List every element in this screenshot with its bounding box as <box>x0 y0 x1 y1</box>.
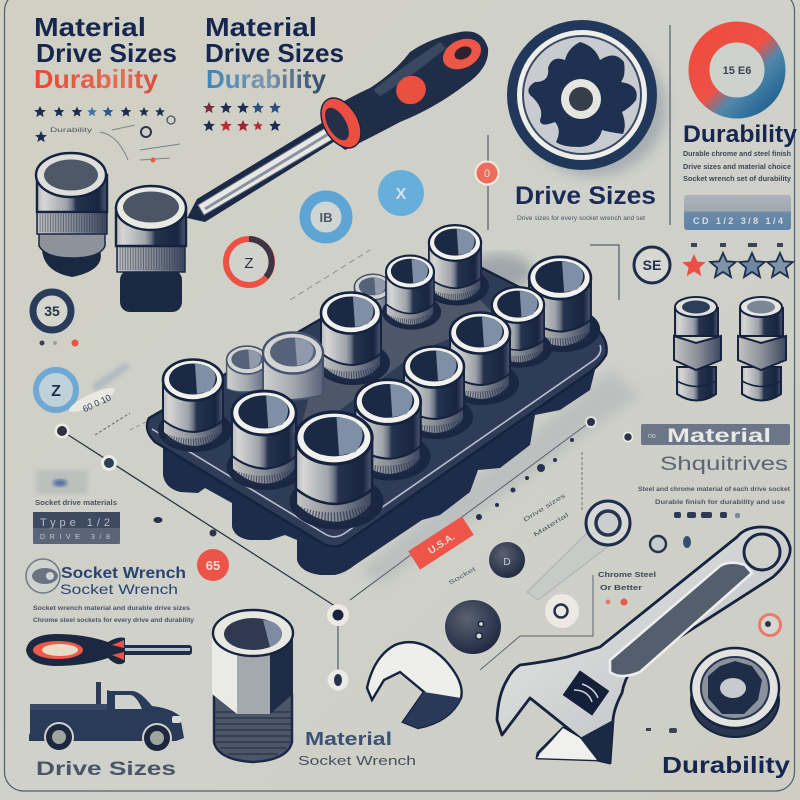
star rating: right <box>682 253 793 277</box>
blue gauge: D <box>305 196 347 238</box>
small dots under circle <box>40 340 78 346</box>
text block: durability <box>683 151 791 183</box>
ball: black D: D <box>503 557 511 568</box>
info panel: left <box>33 512 120 544</box>
dots row <box>674 512 740 518</box>
node dot <box>54 424 70 438</box>
socket 8 <box>263 332 323 400</box>
ball: dark knob <box>445 600 501 654</box>
tray shadow <box>360 370 640 585</box>
socket 11 <box>350 380 431 480</box>
text block: socket wrench <box>33 605 194 624</box>
socket 4 <box>488 287 552 368</box>
caption: socket wrench bottom: Socket Wrench <box>298 753 416 768</box>
socket 6 <box>445 312 519 405</box>
heading: durability bottom: Durability <box>662 752 790 778</box>
heading block: left: Drive Sizes <box>36 38 177 68</box>
node: line dot right <box>586 417 596 427</box>
heading: material bottom: Material <box>305 729 392 749</box>
socket back pale <box>354 274 392 316</box>
heading block: left: Material <box>34 12 146 42</box>
ring gauge: red: Z <box>244 255 254 272</box>
socket right: right <box>738 297 786 400</box>
red badge: 65 <box>197 549 229 581</box>
heading: drive sizes bottom: Drive Sizes <box>36 759 176 780</box>
small text near line: Drive sizes <box>523 493 567 524</box>
donut chart: durability <box>699 32 775 108</box>
pickup truck icon <box>29 682 184 753</box>
socket 7 pale <box>227 346 267 392</box>
heading block: right: Durability <box>206 64 327 94</box>
marker icons along line <box>476 438 574 520</box>
node: line dot <box>210 530 216 536</box>
small screwdriver icon <box>26 634 192 666</box>
heading: drive sizes: Drive Sizes <box>515 182 656 210</box>
node dot 2 <box>101 455 117 471</box>
socket 10 <box>158 360 232 452</box>
screwdriver main <box>187 31 488 222</box>
blue gauge: X <box>378 170 424 216</box>
small caption with sketch marks: Durability <box>50 127 93 134</box>
socket left: large <box>36 153 107 277</box>
tray back haze <box>468 254 532 290</box>
material banner: no <box>648 433 656 440</box>
left circle: 35: 35 <box>44 303 60 319</box>
left circle: 35 <box>33 292 71 330</box>
red tag <box>408 516 474 570</box>
drive socket emblem <box>507 20 666 176</box>
big socket bottom centre <box>212 610 293 762</box>
caption: left: Socket drive materials <box>35 500 117 507</box>
small caption with sketch marks <box>50 116 180 162</box>
text block: material <box>638 486 791 506</box>
donut chart: durability: 15 E6 <box>723 65 751 77</box>
white circle icon <box>545 594 579 628</box>
centre shading <box>300 280 500 430</box>
open wrench <box>367 642 462 728</box>
text block: durability: Durable chrome and steel finish <box>683 151 791 158</box>
blue gauge: X: X <box>396 186 407 203</box>
info panel: left: Type 1/2 <box>40 517 110 529</box>
socket left: front <box>116 186 186 312</box>
left circle: blue Z: Z <box>51 383 61 400</box>
text block: small: Chrome Steel <box>598 570 656 579</box>
text block: material: Steel and chrome material of each drive socket <box>638 486 791 493</box>
node: circle upper <box>327 604 349 626</box>
small labels above stars <box>691 243 783 247</box>
material banner <box>641 424 790 447</box>
tray top <box>147 262 607 546</box>
text block: durability: Socket wrench set of durability <box>683 176 791 183</box>
subheading: material: Shquitrives <box>660 454 788 475</box>
faded mark: 60 0 10 <box>81 392 113 414</box>
badge: red dot <box>476 162 498 184</box>
badge: 36: SE <box>643 257 661 273</box>
socket 9 <box>399 346 473 439</box>
star rating row left <box>34 106 165 142</box>
faded block <box>36 470 88 494</box>
red dots <box>606 598 628 606</box>
left circle: blue Z <box>36 370 76 410</box>
node: circle lower <box>328 670 348 690</box>
heading block: right: Drive Sizes <box>205 38 344 68</box>
heading block: right <box>205 12 344 94</box>
heading: durability right: Durability <box>683 121 798 148</box>
heading: socket wrench: Socket Wrench <box>60 581 178 597</box>
connector lines <box>62 25 670 670</box>
heading: socket wrench <box>60 565 186 597</box>
ring wrench ghost <box>527 501 630 600</box>
socket 5 <box>316 292 390 385</box>
badge: 36 <box>634 247 670 283</box>
tray feet <box>163 350 600 575</box>
socket wrench icon <box>26 559 60 593</box>
ball: black D <box>489 542 525 578</box>
heading: socket wrench: Socket Wrench <box>61 565 186 582</box>
small red ring icon <box>760 614 780 636</box>
heading block: left: Durability <box>34 64 159 94</box>
node: dot near banner <box>624 432 632 442</box>
text block: material: Durable finish for durability and use <box>655 499 785 506</box>
red badge: 65: 65 <box>206 558 220 573</box>
small text near line: Socket <box>448 566 477 587</box>
text block: small <box>598 570 656 592</box>
heading block: right: Material <box>205 12 317 42</box>
small text near line: Material <box>533 512 570 539</box>
info bar <box>684 195 791 230</box>
text block: socket wrench: Chrome steel sockets for every drive and durability <box>33 617 194 624</box>
socket 13 <box>290 412 384 529</box>
text block: small: Or Better <box>600 583 642 592</box>
ring gauge: red <box>226 239 272 285</box>
nut <box>691 648 779 737</box>
badge: red dot: 0 <box>484 168 490 180</box>
info panel: left: DRIVE 3/8 <box>40 534 110 541</box>
mini star rows <box>203 102 281 131</box>
socket 3 <box>524 257 600 352</box>
faded mark <box>67 362 130 435</box>
adjustable wrench <box>497 527 790 763</box>
blue gauge: D: IB <box>320 210 332 225</box>
red tag: U.S.A. <box>426 532 457 557</box>
text block: durability: Drive sizes and material choice <box>683 164 791 171</box>
caption: drive sizes: Drive sizes for every socket wrench and set <box>517 216 645 222</box>
small text near line <box>448 493 570 587</box>
text block: socket wrench: Socket wrench material and durable drive sizes <box>33 605 190 612</box>
socket 2 <box>382 256 441 330</box>
socket 1 <box>425 225 489 306</box>
small icons right <box>650 536 691 552</box>
tray rim highlight <box>152 345 601 537</box>
tray with sockets <box>147 225 640 585</box>
material banner: Material <box>667 426 771 447</box>
small dot <box>154 517 162 523</box>
socket 12 <box>227 391 306 490</box>
info bar: CD 1/2 3/8 1/4 <box>693 216 783 226</box>
tiny marks <box>646 728 677 733</box>
socket right: left <box>674 297 721 400</box>
heading block: left <box>34 12 177 94</box>
